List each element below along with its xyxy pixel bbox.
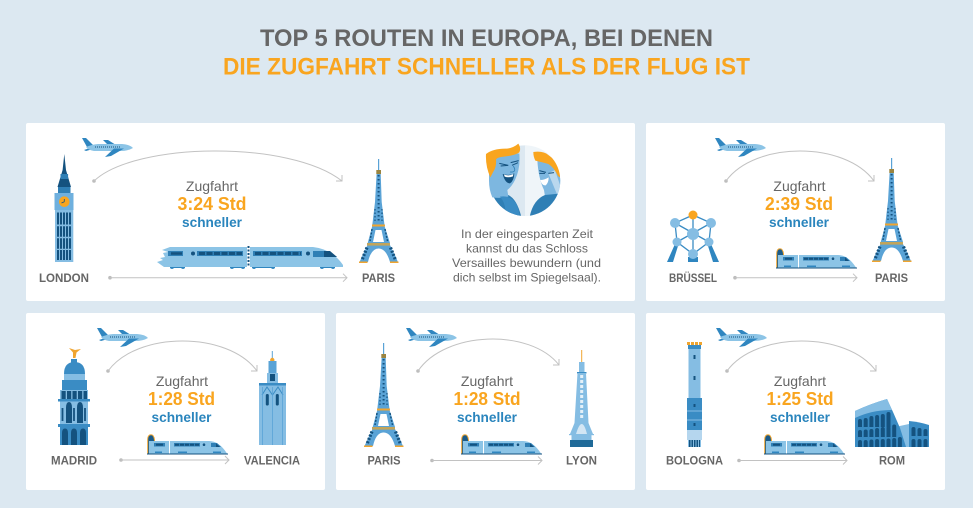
train arrow: [737, 456, 847, 464]
label: Paris: PARIS: [368, 456, 401, 468]
panel: Paris to Lyon: [336, 313, 635, 490]
text: train time saved: Zugfahrt: [461, 373, 513, 389]
icon: Asinelli tower Bologna: [687, 344, 702, 447]
train arrow: [108, 274, 347, 282]
icon: Eiffel Tower: [872, 158, 912, 262]
icon: Big Ben: [54, 154, 74, 262]
icon: laughing faces in mirror: [486, 143, 562, 218]
text: train time saved: 2:39 Std: [765, 193, 833, 214]
text: train time saved: [454, 373, 520, 425]
panel: London to Paris: [26, 123, 635, 301]
label: Brussels: BRÜSSEL: [669, 272, 717, 285]
title: TOP 5 ROUTEN IN EUROPA, BEI DENEN: [260, 25, 713, 52]
label: London: LONDON: [39, 273, 89, 285]
text: train time saved: schneller: [769, 214, 830, 230]
icon: plane: [715, 138, 766, 157]
label: Rome: ROM: [879, 456, 905, 468]
icon: train: [461, 435, 542, 454]
train arrow: [430, 456, 542, 464]
text: train time saved: 1:25 Std: [766, 388, 834, 409]
text: train time saved: schneller: [770, 409, 831, 425]
label: Valencia: VALENCIA: [244, 456, 300, 468]
text: what to do with saved time: dich selbst im Spiegelsaal).: [453, 270, 601, 284]
train arrow: [733, 274, 857, 282]
text: train time saved: Zugfahrt: [774, 373, 826, 389]
train arrow: [119, 456, 229, 464]
icon: plane: [82, 138, 133, 157]
icon: Fourviere tower Lyon: [569, 350, 594, 447]
label: Bologna: BOLOGNA: [666, 456, 723, 468]
label: Lyon: LYON: [566, 456, 597, 468]
icon: plane: [716, 328, 767, 347]
text: train time saved: [178, 178, 246, 230]
text: train time saved: schneller: [182, 214, 243, 230]
icon: Metropolis building Madrid: [58, 348, 90, 445]
label: Paris: PARIS: [875, 273, 908, 285]
text: train time saved: [148, 373, 215, 425]
panel: Madrid to Valencia: [26, 313, 325, 490]
text: what to do with saved time: [452, 227, 601, 284]
text: train time saved: 1:28 Std: [148, 388, 215, 409]
text: train time saved: schneller: [457, 409, 518, 425]
label: Madrid: MADRID: [51, 456, 97, 468]
text: what to do with saved time: In der eingesparten Zeit: [461, 227, 594, 241]
icon: plane: [406, 328, 457, 347]
icon: train: [764, 435, 845, 454]
flight arc arrow: [725, 341, 876, 373]
text: train time saved: Zugfahrt: [773, 178, 826, 194]
icon: Giralda Valencia: [259, 351, 286, 445]
icon: high speed train: [157, 246, 343, 269]
text: train time saved: [765, 178, 833, 230]
title: DIE ZUGFAHRT SCHNELLER ALS DER FLUG IST: [223, 54, 750, 81]
icon: train: [776, 249, 857, 268]
panel: Brussels to Paris: [646, 123, 945, 301]
icon: Colosseum: [855, 399, 929, 447]
flight arc arrow: [92, 151, 342, 183]
text: train time saved: Zugfahrt: [186, 178, 238, 194]
panel: Bologna to Rome: [646, 313, 945, 490]
icon: Eiffel Tower: [359, 159, 398, 263]
flight arc arrow: [106, 341, 257, 373]
text: train time saved: 1:28 Std: [454, 388, 520, 409]
icon: Eiffel Tower: [364, 343, 404, 447]
flight arc arrow: [416, 339, 559, 373]
text: train time saved: 3:24 Std: [178, 193, 246, 214]
text: train time saved: [766, 373, 834, 425]
icon: plane: [97, 328, 148, 347]
flight arc arrow: [724, 151, 874, 183]
text: train time saved: schneller: [152, 409, 212, 425]
text: what to do with saved time: kannst du das Schloss: [466, 242, 588, 256]
text: what to do with saved time: Versailles bewundern (und: [452, 256, 601, 270]
label: Paris: PARIS: [362, 273, 395, 285]
icon: Atomium: [667, 210, 719, 262]
icon: train: [147, 435, 228, 454]
title: [223, 25, 750, 81]
text: train time saved: Zugfahrt: [156, 373, 208, 389]
